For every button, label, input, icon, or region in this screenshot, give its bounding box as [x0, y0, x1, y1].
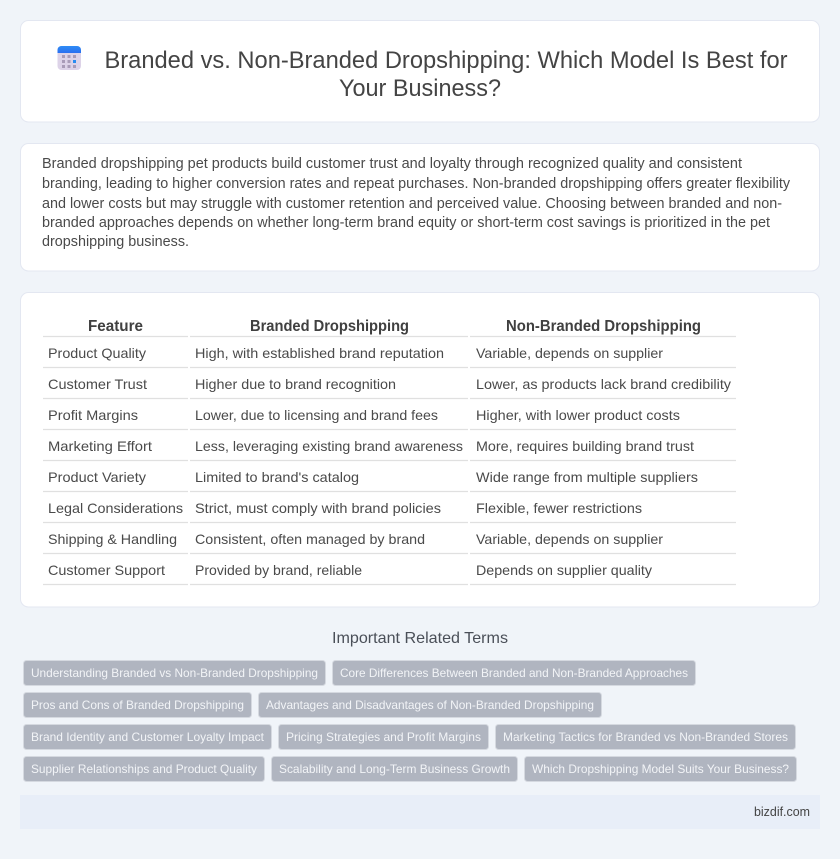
row: customer trust: Customer Trust: [48, 376, 147, 392]
row: shipping and handling: [48, 531, 663, 547]
row: customer support: Customer Support: [48, 562, 165, 578]
row: shipping and handling: Shipping & Handling: [48, 531, 177, 547]
tag row 4: Supplier Relationships and Product Quality: [31, 762, 257, 776]
row: legal considerations: [48, 500, 642, 516]
row: customer trust: [48, 376, 731, 392]
row: marketing effort: Marketing Effort: [48, 438, 152, 454]
table header: Feature: [88, 318, 143, 335]
title: [104, 47, 788, 102]
tag row 4: [24, 756, 796, 782]
panel: intro text: Branded dropshipping pet products build customer trust and loyalty through recognized quality and consistent: [42, 156, 742, 172]
footer: [20, 795, 820, 829]
panel: intro text: branded approaches depends on whether long-term brand equity or short-term cost savings is prioritized in the pet: [42, 215, 770, 231]
row: customer trust: Lower, as products lack brand credibility: [476, 376, 731, 392]
row: product quality: High, with established brand reputation: [195, 345, 444, 361]
tag row 3: Pricing Strategies and Profit Margins: [286, 730, 481, 744]
row: shipping and handling: Consistent, often managed by brand: [195, 531, 425, 547]
panel: intro text: dropshipping business.: [42, 234, 189, 250]
tag row 2: Pros and Cons of Branded Dropshipping: [31, 698, 244, 712]
tag row 1: Core Differences Between Branded and Non-Branded Approaches: [340, 666, 688, 680]
panel: intro text: and lower costs but may struggle with customer retention and perceived value. Choosing between branded and non-: [42, 196, 782, 212]
table header: Non-Branded Dropshipping: [506, 318, 701, 335]
tag row 3: [24, 724, 796, 750]
row: product variety: Product Variety: [48, 469, 146, 485]
row: marketing effort: [48, 438, 694, 454]
row: marketing effort: More, requires building brand trust: [476, 438, 694, 454]
title: Your Business?: [339, 75, 501, 102]
table header: [88, 318, 701, 335]
tag row 4: Which Dropshipping Model Suits Your Business?: [532, 762, 789, 776]
row: legal considerations: Legal Considerations: [48, 500, 183, 516]
row: product variety: Limited to brand's catalog: [195, 469, 359, 485]
row: marketing effort: Less, leveraging existing brand awareness: [195, 438, 463, 454]
row: profit margins: Profit Margins: [48, 407, 138, 423]
related term tags: [24, 660, 796, 782]
row: product variety: Wide range from multiple suppliers: [476, 469, 698, 485]
tag row 3: Brand Identity and Customer Loyalty Impact: [31, 730, 265, 744]
panel: intro text: [20, 144, 820, 271]
row: profit margins: Higher, with lower product costs: [476, 407, 680, 423]
tag row 2: Advantages and Disadvantages of Non-Branded Dropshipping: [266, 698, 594, 712]
row: product quality: Variable, depends on supplier: [476, 345, 663, 361]
row: product quality: Product Quality: [48, 345, 146, 361]
title: Branded vs. Non-Branded Dropshipping: Which Model Is Best for: [104, 47, 788, 74]
row: legal considerations: Strict, must comply with brand policies: [195, 500, 441, 516]
row: legal considerations: Flexible, fewer restrictions: [476, 500, 642, 516]
panel: comparison table: [20, 292, 820, 607]
row: product variety: [48, 469, 698, 485]
row: product quality: [48, 345, 663, 361]
row: profit margins: Lower, due to licensing and brand fees: [195, 407, 438, 423]
row: customer trust: Higher due to brand recognition: [195, 376, 396, 392]
tag row 1: Understanding Branded vs Non-Branded Dropshipping: [31, 666, 318, 680]
row: customer support: Depends on supplier quality: [476, 562, 652, 578]
table header: Branded Dropshipping: [250, 318, 409, 335]
tag row 1: [24, 660, 696, 686]
row: customer support: Provided by brand, reliable: [195, 562, 362, 578]
tag row 4: Scalability and Long-Term Business Growth: [279, 762, 510, 776]
panel: title card: [20, 20, 820, 122]
row: customer support: [48, 562, 652, 578]
tag row 2: [24, 692, 602, 718]
footer: bizdif.com: [754, 805, 810, 819]
row: profit margins: [48, 407, 680, 423]
heading: important related terms: Important Related Terms: [332, 630, 508, 647]
tag row 3: Marketing Tactics for Branded vs Non-Branded Stores: [503, 730, 788, 744]
row: shipping and handling: Variable, depends on supplier: [476, 531, 663, 547]
panel: intro text: branding, leading to higher conversion rates and repeat purchases. Non-branded dropshipping offers greater flexibility: [42, 176, 791, 192]
icon: calendar: [58, 46, 81, 70]
